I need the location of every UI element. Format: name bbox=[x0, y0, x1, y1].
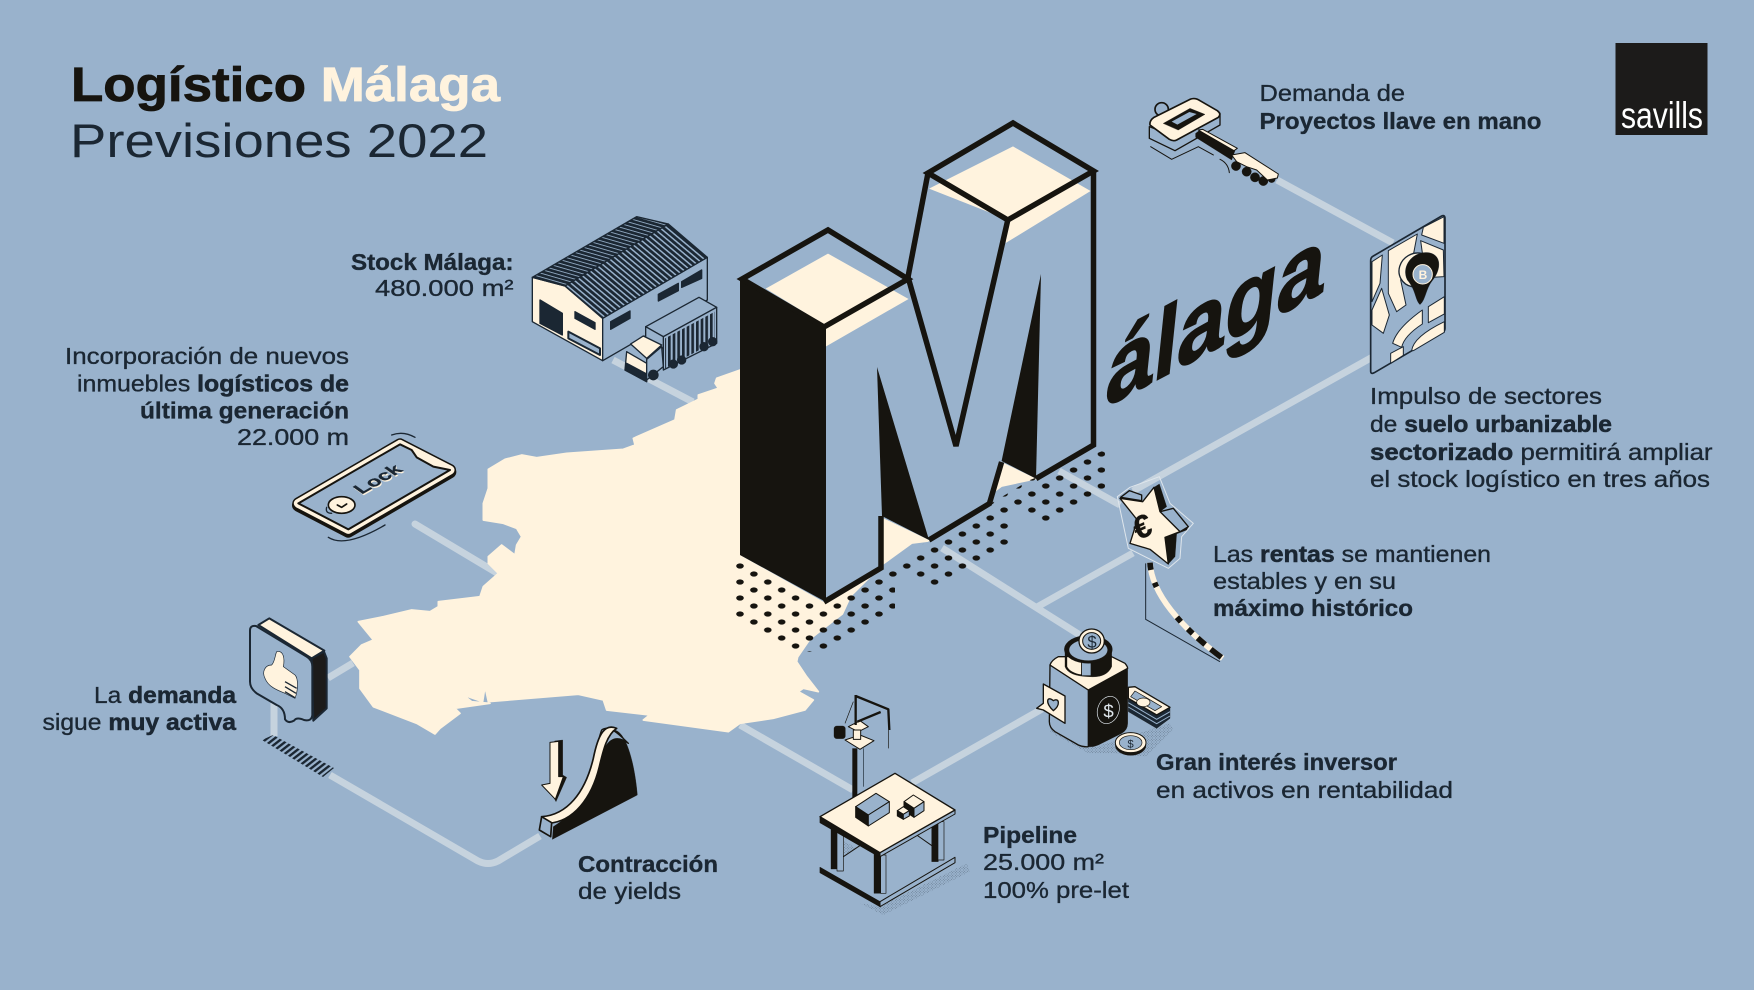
icon: yield curve slide with arrow bbox=[539, 727, 637, 839]
text: land: el stock logístico en tres años bbox=[1370, 466, 1710, 492]
text: demand bbox=[42, 682, 236, 735]
giant isometric letter M bbox=[740, 123, 1094, 602]
savills logo: savills bbox=[1621, 95, 1703, 136]
icon: money jar: $ bbox=[1127, 738, 1134, 750]
icon: star with euro bbox=[1117, 477, 1193, 568]
text: investor interest: en activos en rentabilidad bbox=[1156, 777, 1453, 803]
text: new buildings: Incorporación de nuevos bbox=[65, 343, 349, 369]
text: yields: Contracción bbox=[578, 851, 718, 877]
text: turnkey: Demanda de bbox=[1260, 80, 1405, 106]
icon: smartphone lock bbox=[298, 433, 450, 541]
text: rents bbox=[1213, 541, 1491, 621]
text: stock bbox=[351, 249, 514, 301]
hatch pad below bubble bbox=[262, 735, 334, 777]
title: Logístico Málaga bbox=[71, 59, 500, 112]
text: new buildings: 22.000 m bbox=[237, 424, 349, 450]
text: demand: sigue muy activa bbox=[42, 709, 236, 735]
text: land: de suelo urbanizable bbox=[1370, 411, 1612, 437]
icon: money jar: $ bbox=[1087, 632, 1097, 651]
icon: falling rent curve bbox=[1146, 563, 1223, 662]
icon: smartphone lock: Lock bbox=[350, 462, 408, 497]
icon: thumbs up bubble bbox=[250, 618, 327, 722]
text: pipeline: 25.000 m² bbox=[983, 849, 1104, 875]
connector lines bbox=[274, 180, 1393, 864]
text: new buildings: inmuebles logísticos de bbox=[77, 370, 349, 396]
map of Málaga province bbox=[350, 327, 1036, 734]
icon: street map with pin: B bbox=[1419, 268, 1428, 282]
text: turnkey: Proyectos llave en mano bbox=[1260, 108, 1542, 134]
text: new buildings bbox=[65, 343, 349, 450]
icon: construction table with crane bbox=[820, 695, 970, 915]
icon: street map with pin bbox=[1371, 216, 1445, 373]
icon: smartphone lock: Lock bbox=[351, 463, 409, 499]
word álaga: álaga bbox=[1102, 202, 1332, 430]
text: pipeline bbox=[983, 822, 1130, 903]
icon: warehouse and truck bbox=[532, 217, 717, 382]
icon: star with euro: € bbox=[1129, 506, 1156, 547]
text: land bbox=[1370, 383, 1713, 492]
text: stock: Stock Málaga: bbox=[351, 249, 514, 275]
text: pipeline: 100% pre-let bbox=[983, 877, 1130, 903]
savills logo bbox=[1616, 43, 1708, 136]
text: stock: 480.000 m² bbox=[375, 275, 514, 301]
text: land: Impulso de sectores bbox=[1370, 383, 1602, 409]
halftone dot shadow of the M bbox=[735, 450, 1105, 652]
text: turnkey bbox=[1260, 80, 1542, 134]
text: yields bbox=[578, 851, 718, 904]
text: rents: máximo histórico bbox=[1213, 595, 1413, 621]
text: land: sectorizado permitirá ampliar bbox=[1370, 439, 1713, 465]
icon: key bbox=[1149, 99, 1278, 186]
text: demand: La demanda bbox=[94, 682, 236, 708]
title: Previsiones 2022 bbox=[70, 114, 488, 167]
text: rents: Las rentas se mantienen bbox=[1213, 541, 1491, 567]
icon: money jar bbox=[1037, 629, 1173, 757]
title bbox=[70, 59, 500, 167]
text: yields: de yields bbox=[578, 878, 681, 904]
text: investor interest: Gran interés inversor bbox=[1156, 749, 1397, 775]
text: rents: estables y en su bbox=[1213, 568, 1396, 594]
text: investor interest bbox=[1156, 749, 1453, 803]
text: pipeline: Pipeline bbox=[983, 822, 1077, 848]
text: new buildings: última generación bbox=[140, 398, 349, 424]
icon: money jar: $ bbox=[1103, 700, 1114, 721]
